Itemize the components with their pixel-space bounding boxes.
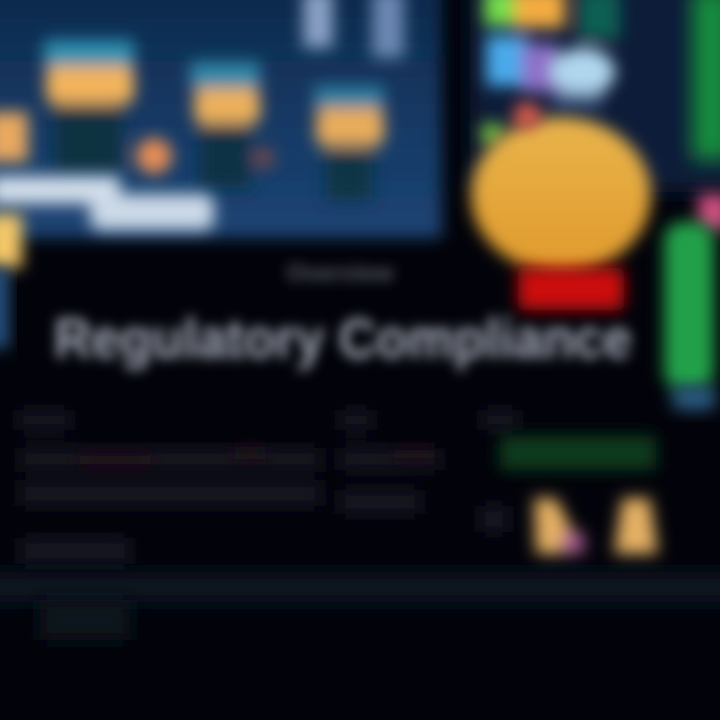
green leaf <box>480 122 504 146</box>
title: Regulatory Compliance <box>54 307 632 371</box>
footer band <box>0 572 720 602</box>
kicker text: Overview <box>287 260 394 287</box>
blue bar foot <box>672 386 716 410</box>
footer logo <box>40 600 130 640</box>
pink accent <box>698 194 720 230</box>
figure: right <box>314 86 384 200</box>
green label <box>500 436 656 470</box>
icon: left avatar <box>534 498 584 554</box>
green side bar bottom <box>664 222 714 390</box>
top bars <box>303 0 404 58</box>
icon: right avatar <box>614 498 658 554</box>
red dot <box>513 102 541 130</box>
panel: right scene <box>470 0 720 410</box>
figure: cropped far left <box>0 112 28 162</box>
colour blocks <box>484 0 620 110</box>
column three label <box>480 410 518 532</box>
panel: left scene <box>0 0 442 348</box>
blue edge stripe <box>0 268 8 348</box>
figure: middle <box>190 62 274 188</box>
green side bar top <box>692 0 720 160</box>
figure: left <box>44 40 172 174</box>
red text accents <box>80 446 435 466</box>
body text columns <box>18 410 518 564</box>
column two <box>340 410 440 514</box>
orange badge <box>471 117 651 273</box>
red base <box>518 268 624 310</box>
white cloud strip <box>0 176 214 230</box>
column one <box>18 410 320 564</box>
yellow edge shape <box>0 214 22 268</box>
